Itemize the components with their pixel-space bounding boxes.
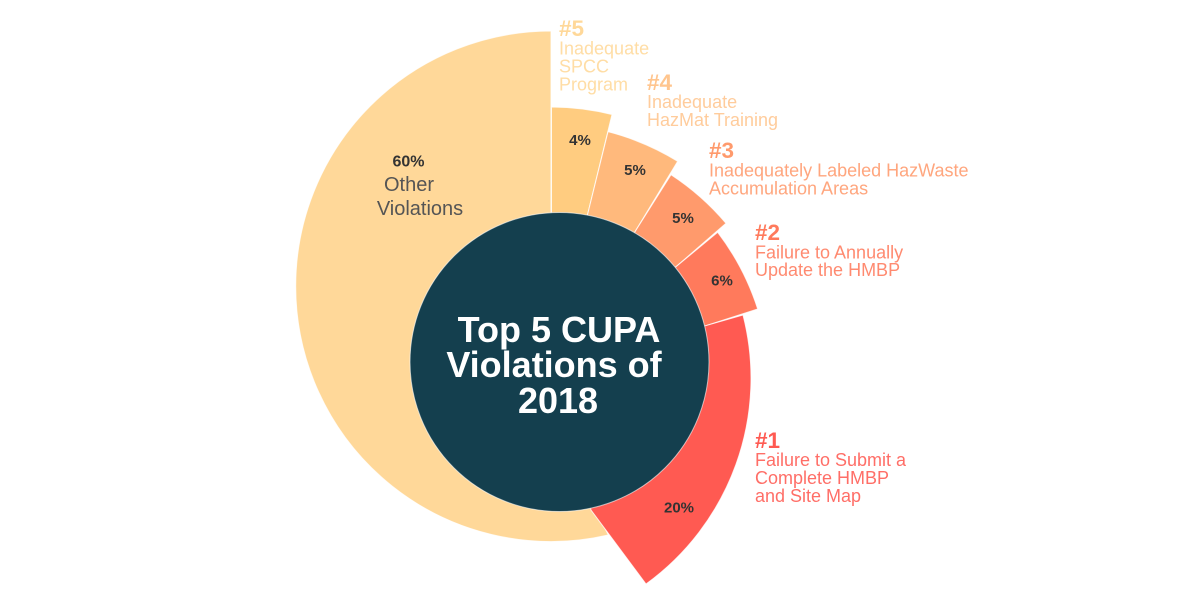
center circle with title [410, 212, 709, 512]
percent label: 6%: 6% [711, 272, 733, 290]
percent label: 60% other violations [377, 154, 463, 220]
percent label: 60% other violations: Violations [377, 198, 463, 220]
label: #5: #5 [559, 16, 584, 41]
label: #3 [709, 138, 969, 198]
label: #3: #3 [709, 138, 734, 163]
label: #4: Inadequate [647, 92, 737, 112]
slice: #3 5% [559, 175, 726, 362]
label: #2 [755, 220, 903, 280]
slice: other violations 60% [296, 31, 608, 542]
label: #3: Accumulation Areas [709, 178, 868, 198]
label: #1: Complete HMBP [755, 468, 889, 488]
percent label: 4%: 4% [569, 132, 591, 149]
percent label: 60% other violations: Other [384, 174, 434, 196]
label: #4: HazMat Training [647, 110, 778, 130]
label: #1: Failure to Submit a [755, 450, 907, 470]
label: #4 [647, 70, 778, 130]
label: #5 [559, 16, 649, 94]
slice: #2 6% [559, 232, 758, 362]
label: #2: #2 [755, 220, 780, 245]
label: #1 [755, 428, 907, 506]
title: Top 5 CUPA [458, 309, 660, 350]
label: #1: and Site Map [755, 486, 861, 506]
label: #3: Inadequately Labeled HazWaste [709, 160, 969, 180]
label: #1: #1 [755, 428, 780, 453]
slice: #4 5% [559, 132, 678, 362]
slice: #5 4% [552, 107, 612, 362]
label: #2: Failure to Annually [755, 242, 903, 262]
label: #5: Inadequate [559, 38, 649, 58]
percent label: 20%: 20% [664, 500, 694, 516]
percent label: 5%: 5% [672, 210, 694, 227]
label: #5: SPCC [559, 56, 609, 76]
percent label: 60% other violations: 60% [392, 154, 425, 170]
slice: #1 20% [559, 315, 751, 584]
label: #2: Update the HMBP [755, 260, 900, 280]
label: #5: Program [559, 74, 628, 94]
title: 2018 [518, 380, 598, 421]
title: Violations of [446, 344, 663, 385]
label: #4: #4 [647, 70, 673, 95]
percent label: 5%: 5% [624, 162, 646, 179]
chart: donut of violations [296, 31, 758, 584]
